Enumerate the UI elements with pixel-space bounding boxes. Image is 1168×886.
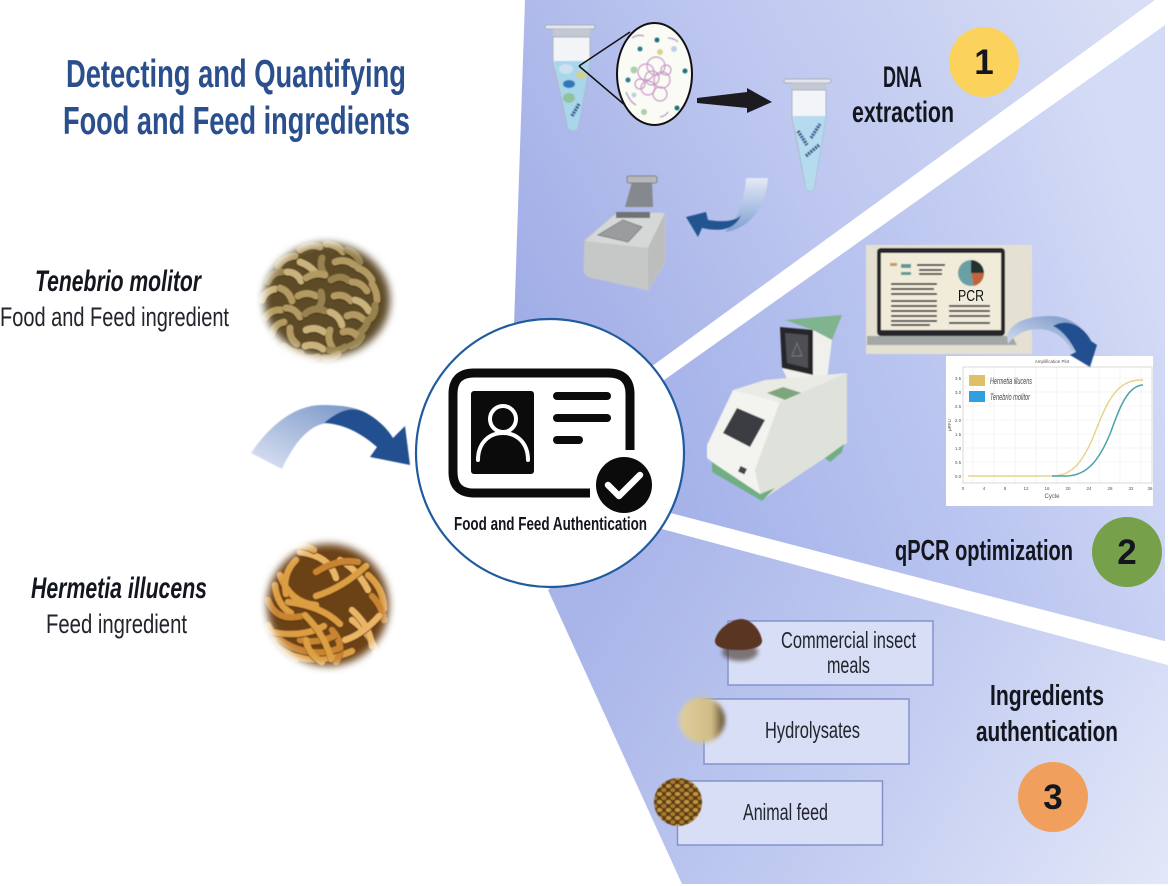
- chart legend: [969, 375, 1032, 402]
- panel: step 2 qPCR optimization background: [640, 25, 1165, 642]
- chart axis labels: 20: [1065, 486, 1071, 491]
- chart axis labels: µRFU: [947, 419, 952, 431]
- chart axis labels: 24: [1086, 486, 1092, 491]
- box: hydrolysates: [704, 699, 909, 764]
- label: Hermetia illucens: [31, 572, 207, 639]
- chart axis labels: 32: [1128, 486, 1134, 491]
- panel: step 1 DNA extraction background: [512, 0, 1155, 385]
- box: commercial insect meals: [728, 621, 933, 685]
- chart axis labels: 4: [983, 486, 986, 491]
- box: commercial insect meals: Commercial insect: [781, 627, 916, 653]
- chart axis labels: 0.5: [955, 460, 962, 465]
- chart axis labels: [947, 359, 1153, 500]
- image: Tenebrio molitor larvae: [258, 236, 396, 364]
- chart axis labels: 12: [1023, 486, 1029, 491]
- chart axis labels: 3.5: [955, 376, 962, 381]
- chart: amplification plot: [946, 356, 1153, 506]
- arrow: insects to authentication: [251, 405, 410, 469]
- title: Detecting and Quantifying: [66, 53, 406, 96]
- curve: Tenebrio molitor: [1052, 385, 1143, 476]
- label: Hermetia illucens: Feed ingredient: [46, 609, 187, 639]
- chart axis labels: 1.5: [955, 432, 962, 437]
- label: Ingredients authentication: [976, 680, 1118, 748]
- badge: step 1: 1: [974, 43, 994, 82]
- image: Hermetia illucens larvae: [260, 538, 396, 672]
- box: hydrolysates: Hydrolysates: [765, 717, 860, 743]
- white diagonal band lower: [640, 506, 1168, 665]
- badge: step 3: [1018, 762, 1088, 832]
- icon: laptop with PCR report: PCR: [958, 288, 984, 305]
- arrow: black process arrow: [697, 88, 772, 113]
- chart legend: Tenebrio molitor: [990, 392, 1031, 402]
- arrow: curved blue arrow to thermomixer: [686, 178, 768, 237]
- center circle: food and feed authentication: [416, 319, 684, 587]
- box: animal feed: Animal feed: [743, 799, 828, 825]
- label: Tenebrio molitor: [0, 265, 229, 332]
- badge: step 3: 3: [1043, 778, 1063, 817]
- chart legend: Hermetia illucens: [990, 376, 1032, 386]
- label: qPCR optimization: qPCR optimization: [895, 535, 1073, 567]
- icon: hydrolysate powder: [679, 697, 725, 743]
- chart axis labels: 2.0: [955, 418, 962, 423]
- icon: tube with extracted DNA: [784, 79, 831, 191]
- title: [63, 53, 410, 143]
- title: Food and Feed ingredients: [63, 100, 410, 143]
- white diagonal band upper: [640, 0, 1168, 397]
- chart axis labels: 36: [1147, 486, 1153, 491]
- panel: step 3 ingredients authentication background: [548, 523, 1168, 884]
- chart axis labels: 3.0: [955, 390, 962, 395]
- chart axis labels: Amplification Plot: [1035, 359, 1070, 364]
- label: Hermetia illucens: Hermetia illucens: [31, 572, 207, 605]
- chart axis labels: 8: [1004, 486, 1007, 491]
- box: animal feed: [678, 781, 882, 845]
- chart axis labels: 2.5: [955, 404, 962, 409]
- badge: step 2: [1092, 517, 1162, 587]
- arrow: curved blue arrow laptop to chart: [1007, 316, 1097, 367]
- icon: ID card with check mark: [453, 373, 652, 513]
- badge: step 1: [949, 27, 1019, 97]
- chart axis labels: 1.0: [955, 446, 962, 451]
- icon: qPCR thermal cycler: [707, 315, 847, 501]
- icon: thermomixer device: [584, 176, 665, 290]
- label: Tenebrio molitor: Tenebrio molitor: [35, 265, 203, 298]
- box: commercial insect meals: meals: [827, 652, 870, 678]
- icon: insect meal powder: [715, 619, 762, 661]
- label: DNA extraction: DNA: [883, 61, 922, 94]
- label: DNA extraction: extraction: [852, 96, 954, 129]
- curve: Hermetia illucens: [968, 380, 1143, 476]
- chart axis labels: 28: [1107, 486, 1113, 491]
- label: Ingredients authentication: Ingredients: [990, 680, 1104, 712]
- icon: magnified cell view: [579, 23, 692, 125]
- label: DNA extraction: [852, 61, 954, 129]
- icon: sample tube with lysate: [545, 25, 595, 131]
- icon: laptop with PCR report: [866, 245, 1032, 354]
- chart axis labels: 0.0: [955, 474, 962, 479]
- icon: animal feed grains: [654, 778, 702, 826]
- label: Tenebrio molitor: Food and Feed ingredient: [0, 302, 229, 332]
- center circle caption: Food and Feed Authentication: [454, 514, 647, 534]
- chart axis labels: 0: [962, 486, 965, 491]
- badge: step 2: 2: [1117, 533, 1137, 572]
- chart axis labels: Cycle: [1044, 494, 1060, 500]
- chart axis labels: 16: [1044, 486, 1050, 491]
